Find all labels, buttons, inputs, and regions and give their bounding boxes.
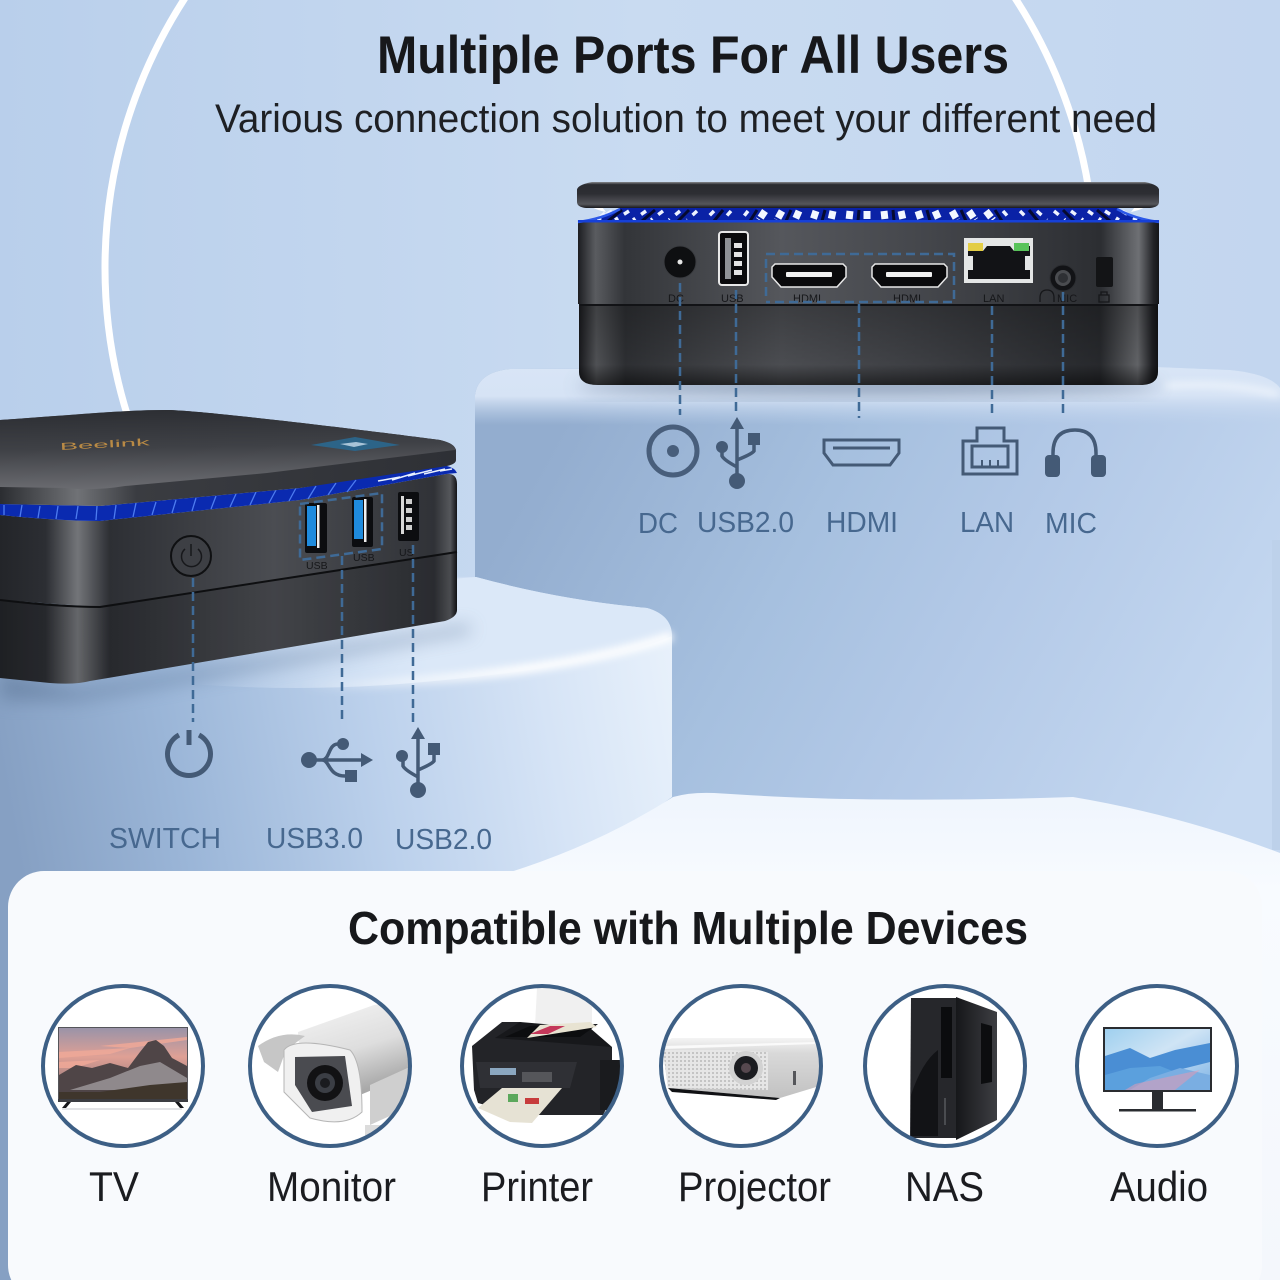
label: Audio: Audio — [1110, 1163, 1208, 1210]
power button — [171, 536, 211, 576]
port labels: USB — [721, 293, 744, 305]
label: USB2.0 front: USB2.0 — [395, 824, 492, 856]
label: NAS: NAS — [905, 1163, 984, 1210]
device: Projector — [661, 986, 823, 1146]
port labels: LAN — [983, 293, 1004, 305]
right pedestal — [475, 367, 1280, 880]
port: HDMI 1 — [772, 264, 846, 287]
sticker — [311, 437, 400, 451]
upper body — [0, 474, 457, 607]
headphone and lock marks — [1040, 290, 1109, 302]
label: HDMI: HDMI — [826, 507, 898, 539]
device: Audio display — [1077, 986, 1237, 1146]
port labels: US — [399, 547, 414, 559]
label: TV: TV — [89, 1163, 139, 1210]
port labels — [306, 547, 414, 572]
label: USB3.0: USB3.0 — [266, 823, 363, 855]
port labels — [668, 293, 1077, 305]
port: lock — [1096, 257, 1113, 287]
panel: compatible devices — [8, 871, 1262, 1280]
icon: LAN — [963, 428, 1017, 474]
label: MIC: MIC — [1045, 508, 1097, 540]
lid — [577, 182, 1159, 208]
port: DC — [664, 246, 696, 278]
subtitle: Various connection solution to meet your different need — [215, 97, 1157, 141]
port labels: USB — [353, 552, 375, 564]
label: LAN: LAN — [960, 507, 1014, 539]
label: Projector: Projector — [678, 1163, 831, 1210]
port: HDMI 2 — [872, 264, 947, 287]
lid — [0, 410, 456, 506]
icon: HDMI — [824, 440, 899, 465]
screen — [58, 1027, 188, 1102]
port labels: MIC — [1057, 293, 1077, 305]
decorative white ring — [105, 0, 1095, 763]
device: front view — [0, 410, 470, 700]
logo: Beelink — [60, 437, 153, 453]
title: Multiple Ports For All Users — [377, 26, 1009, 85]
blue vent band — [578, 208, 1159, 222]
white foreground mound — [484, 793, 1280, 1280]
lower body — [579, 304, 1158, 385]
device: Monitor camera — [250, 986, 420, 1160]
icon: USB3.0 — [301, 738, 373, 782]
label: Monitor: Monitor — [267, 1163, 396, 1210]
lower body — [0, 552, 457, 684]
blue vent band — [0, 465, 457, 521]
label: Printer: Printer — [481, 1163, 593, 1210]
top surface — [0, 410, 455, 489]
port: USB 2.0 — [398, 492, 419, 541]
label: SWITCH: SWITCH — [109, 823, 221, 855]
icon: DC — [649, 427, 697, 475]
port: USB 3.0 left — [305, 503, 327, 553]
port labels: HDMI — [893, 293, 921, 305]
icon: USB2.0 front — [396, 727, 440, 798]
device: rear view — [576, 182, 1160, 394]
icon: USB2.0 rear — [716, 417, 760, 489]
upper body — [578, 222, 1159, 304]
device: TV — [43, 986, 203, 1146]
label: USB2.0 rear: USB2.0 — [697, 507, 794, 539]
port labels: DC — [668, 293, 684, 305]
left pedestal — [0, 570, 672, 1280]
port: LAN — [964, 238, 1033, 283]
port: USB — [719, 232, 748, 285]
device: Printer — [462, 986, 622, 1146]
icon: power switch — [167, 730, 210, 776]
connector dashes: rear ports — [680, 254, 1063, 418]
port labels: HDMI — [793, 293, 821, 305]
port labels: USB — [306, 560, 328, 572]
device: NAS tower — [865, 986, 1025, 1146]
heading: Compatible with Multiple Devices — [348, 902, 1028, 954]
port: MIC — [1050, 265, 1076, 291]
icon: MIC headphones — [1045, 430, 1106, 477]
label: DC: DC — [638, 508, 678, 540]
connector dashes: front ports — [193, 493, 413, 726]
port: USB 3.0 right — [352, 497, 373, 547]
